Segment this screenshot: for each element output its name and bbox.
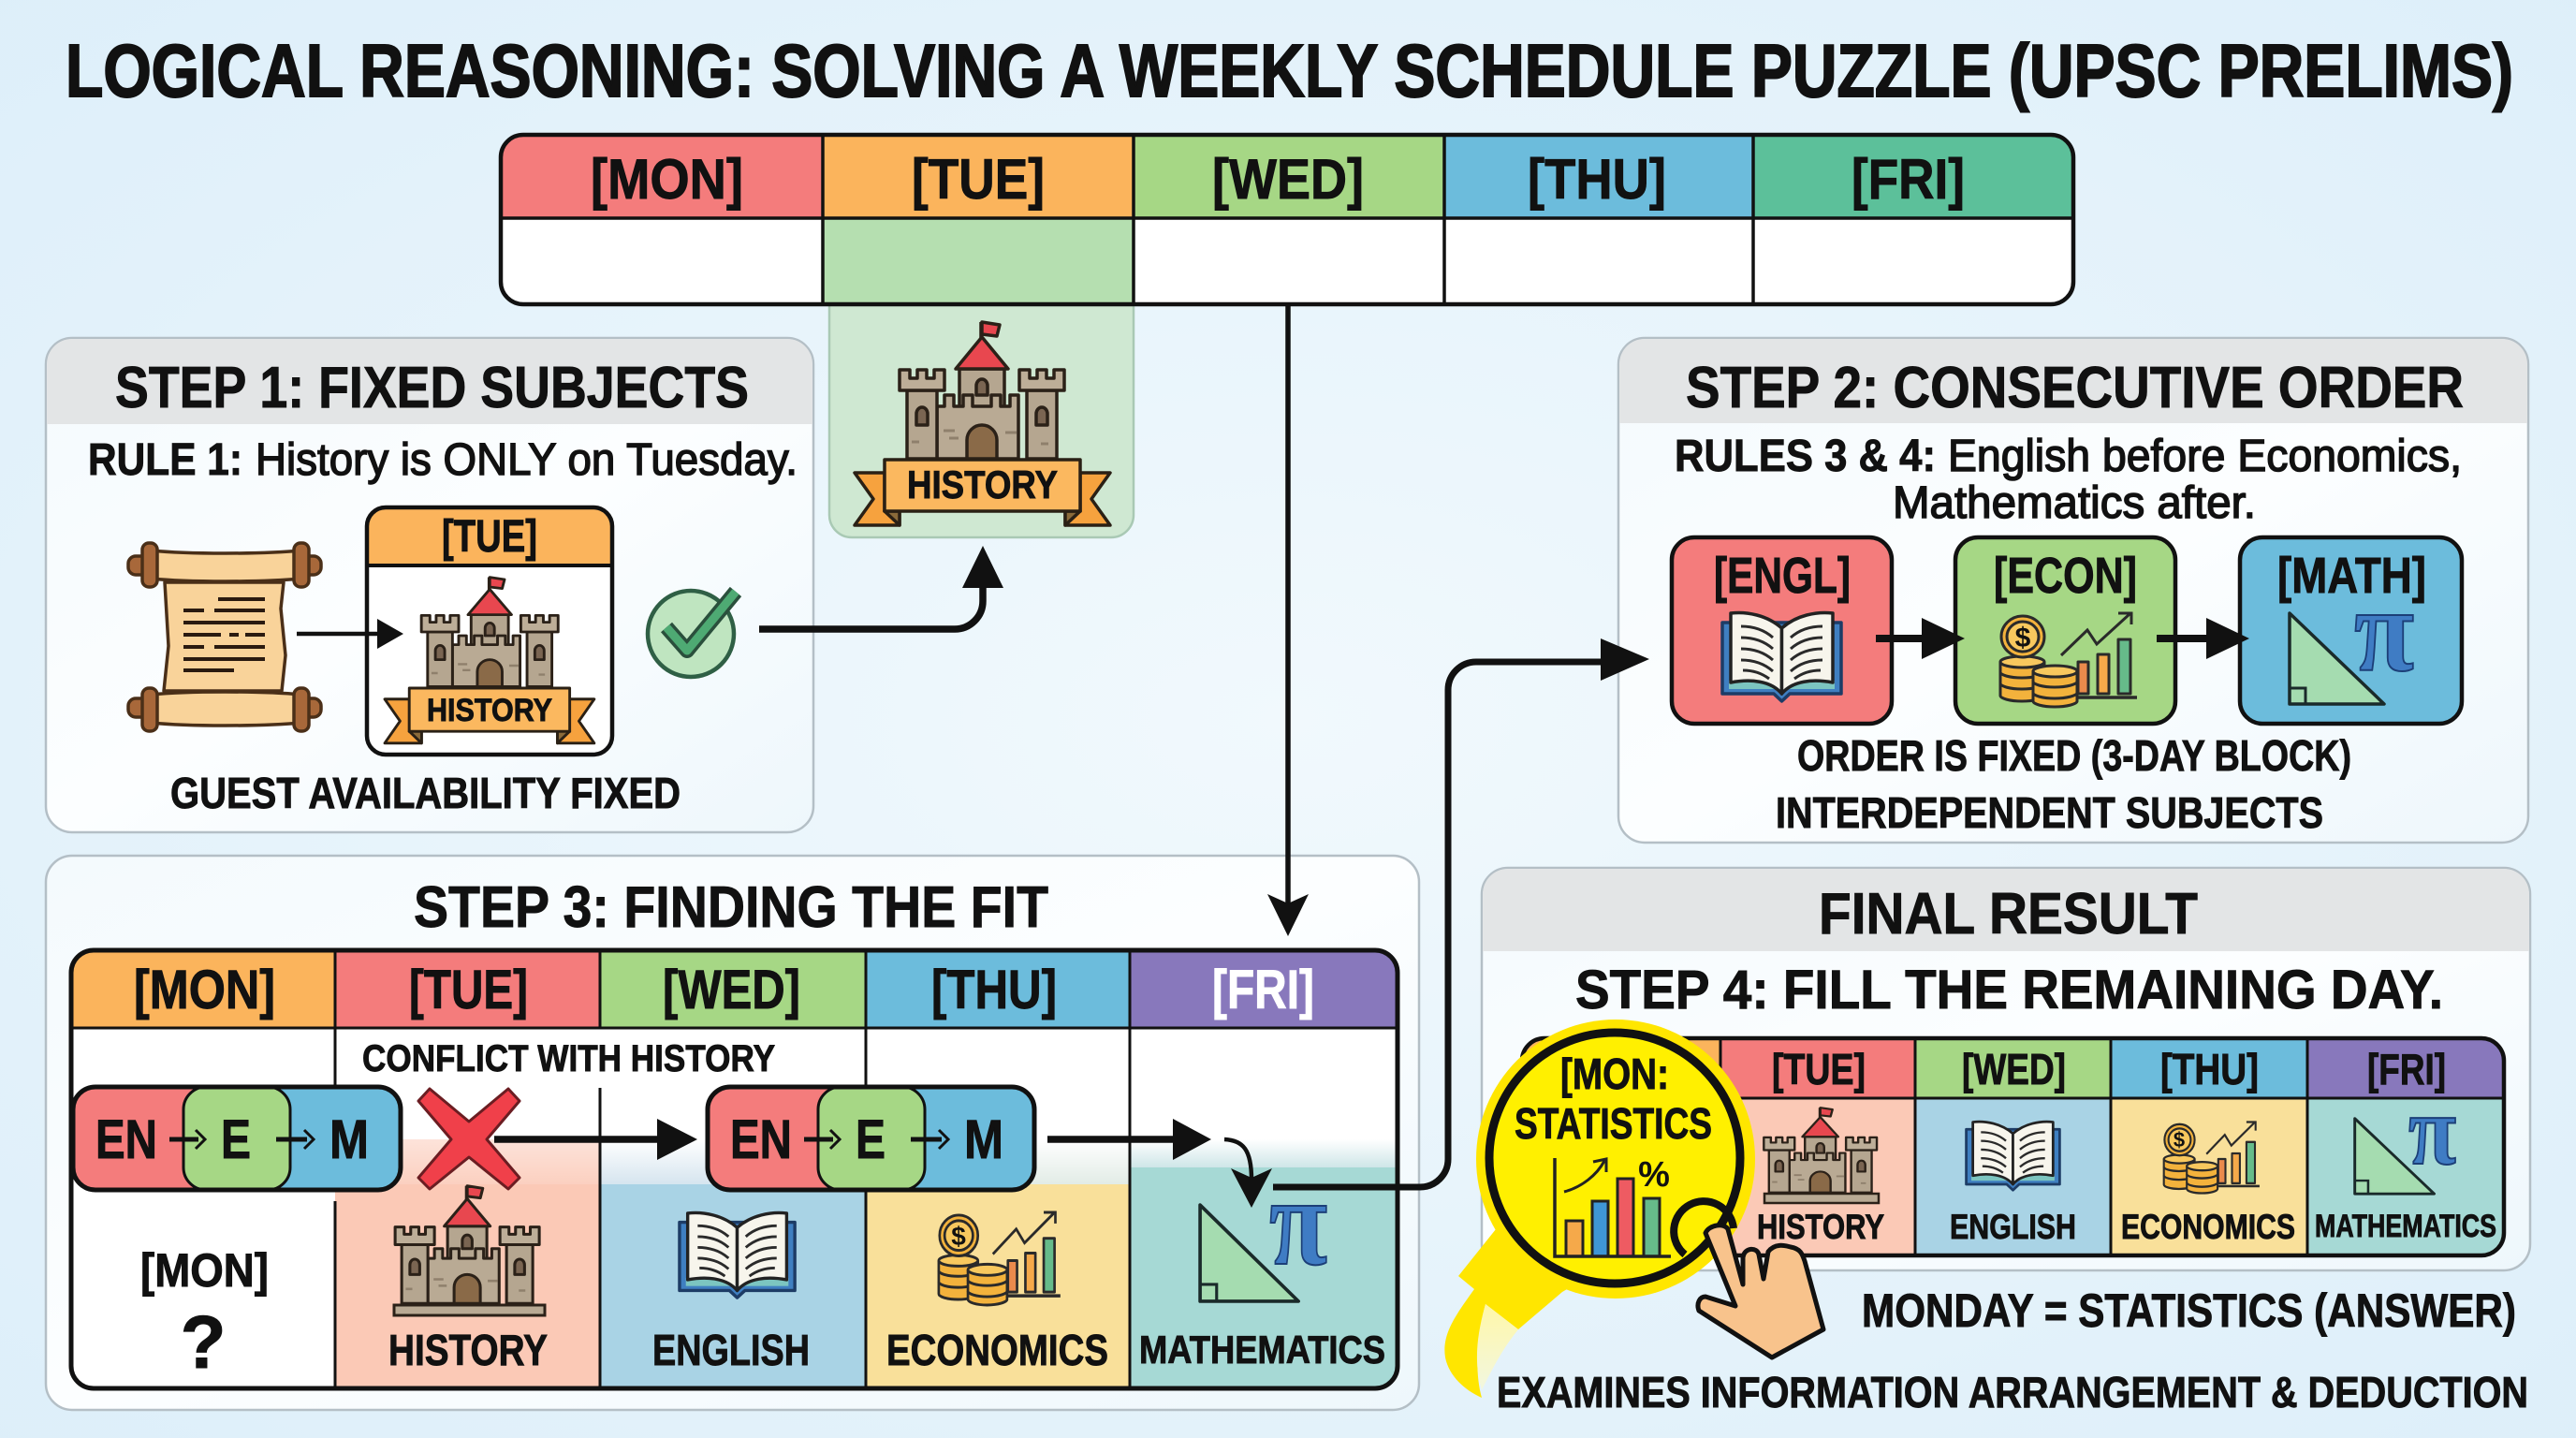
cell: History: HISTORY: [1757, 1208, 1884, 1246]
cell: Economics: [2121, 1123, 2295, 1246]
cell: Monday unknown: ?: [181, 1300, 226, 1384]
schedule table: step 3: [FRI]: [1212, 960, 1314, 1020]
arrow: English to Economics: [1876, 618, 1965, 659]
arrow: fit to step 2: [1273, 638, 1649, 1187]
box: Economics: $: [2015, 623, 2031, 653]
cell: English: ENGLISH: [1950, 1208, 2076, 1246]
icon: castle: [900, 322, 1064, 459]
schedule table: step 3: [THU]: [931, 960, 1057, 1020]
cell: Economics: ECONOMICS: [886, 1326, 1108, 1374]
weekly schedule table: [FRI]: [1852, 148, 1965, 211]
block: EN E M first attempt: [73, 1087, 401, 1190]
schedule table: step 3: [MON]: [134, 960, 275, 1020]
cell: History: HISTORY: [388, 1326, 548, 1374]
panel: step 1: [46, 338, 813, 832]
block: EN E M second attempt: EN: [730, 1109, 792, 1170]
heading: step 4: STEP 4: FILL THE REMAINING DAY.: [1575, 960, 2443, 1020]
cell: Economics: [886, 1212, 1108, 1374]
cell: History: [388, 1186, 548, 1374]
rules 3 and 4 text: RULES 3 & 4:: [1675, 432, 1936, 481]
box: Mathematics: [MATH]: [2277, 548, 2426, 604]
arrow: continue to Friday: [1047, 1119, 1211, 1160]
heading: step 3: STEP 3: FINDING THE FIT: [414, 875, 1048, 940]
icon: history banner: [385, 688, 594, 743]
weekly schedule table: [THU]: [1528, 148, 1666, 211]
icon: history banner: HISTORY: [907, 462, 1058, 506]
weekly schedule table: [TUE]: [912, 148, 1045, 211]
schedule table: step 3: [TUE]: [409, 960, 528, 1020]
chart: statistics bars: %: [1638, 1155, 1670, 1195]
box: Economics: [ECON]: [1994, 548, 2137, 604]
panel: Tuesday history extension: [829, 304, 1134, 537]
block: EN E M second attempt: M: [964, 1109, 1003, 1170]
cell: History: [1757, 1108, 1884, 1246]
heading: final result: FINAL RESULT: [1819, 882, 2198, 946]
rule 1 text: History is ONLY on Tuesday.: [256, 435, 798, 485]
block: EN E M first attempt: EN: [95, 1109, 157, 1170]
rules 3 and 4 text: [1675, 432, 2462, 528]
schedule table: final: [1522, 1038, 2504, 1255]
icon: scroll: [128, 543, 321, 731]
cell: English: [1950, 1122, 2076, 1246]
caption: interdependent subjects: INTERDEPENDENT SUBJECTS: [1776, 788, 2323, 837]
cell: Mathematics: [2315, 1076, 2496, 1244]
icon: history banner: HISTORY: [427, 693, 552, 728]
block: EN E M second attempt: [708, 1087, 1034, 1190]
cell: Economics: $: [951, 1222, 966, 1251]
rules 3 and 4 text: Mathematics after.: [1893, 478, 2256, 528]
heading: step 2: STEP 2: CONSECUTIVE ORDER: [1686, 356, 2464, 420]
text: Statistics: STATISTICS: [1515, 1099, 1712, 1148]
cell: Monday unknown: [140, 1244, 269, 1384]
text: Monday: [MON:: [1560, 1049, 1669, 1098]
arrow: scroll to card: [297, 619, 403, 649]
icon: red cross: [418, 1089, 520, 1189]
cell: Mathematics: [1139, 1152, 1385, 1372]
heading: step 1: STEP 1: FIXED SUBJECTS: [115, 356, 749, 420]
arrow: small curved down: [1224, 1139, 1272, 1208]
icon: pointing hand: [1698, 1225, 1823, 1357]
caption: order fixed: ORDER IS FIXED (3-DAY BLOCK): [1797, 731, 2351, 780]
arrow: Economics to Mathematics: [2157, 618, 2249, 659]
schedule table: final: [TUE]: [1772, 1045, 1866, 1093]
arrow: top table to Friday: [1267, 304, 1309, 936]
card: Tuesday: [367, 507, 612, 755]
schedule table: final: [FRI]: [2367, 1045, 2446, 1093]
cell: Economics: $: [2174, 1128, 2185, 1152]
panel: step 2: [1618, 338, 2528, 843]
cell: Monday unknown: [MON]: [140, 1244, 269, 1297]
icon: magnifier with Monday statistics: [1476, 1020, 1755, 1299]
panel: step 3: [46, 856, 1419, 1410]
weekly schedule table: [501, 135, 2073, 304]
cell: English: [652, 1212, 810, 1374]
icon: castle: [421, 578, 558, 686]
cell: English: ENGLISH: [652, 1326, 810, 1374]
chart: statistics bars: [1555, 1155, 1671, 1256]
box: Mathematics: π: [2354, 564, 2414, 697]
weekly schedule table: [MON]: [591, 148, 743, 211]
block: EN E M second attempt: E: [856, 1109, 886, 1170]
arrow: check to Tuesday panel: [759, 546, 1003, 629]
conflict label: CONFLICT WITH HISTORY: [362, 1038, 775, 1079]
card: Tuesday: [TUE]: [442, 512, 537, 562]
cell: Mathematics: π: [2408, 1076, 2456, 1185]
arrow: shift to Wednesday: [494, 1119, 697, 1160]
box: English: [ENGL]: [1714, 548, 1851, 604]
rules 3 and 4 text: English before Economics,: [1948, 432, 2462, 481]
schedule table: step 3: [71, 950, 1398, 1388]
box: Mathematics: [2240, 537, 2462, 724]
cell: Mathematics: π: [1269, 1152, 1327, 1292]
icon: history banner: [855, 460, 1110, 525]
rule 1 text: RULE 1:: [88, 435, 242, 485]
block: EN E M first attempt: E: [221, 1109, 251, 1170]
cell: Mathematics: MATHEMATICS: [2315, 1209, 2496, 1244]
schedule table: final: [THU]: [2160, 1045, 2259, 1093]
box: English: [1672, 537, 1892, 724]
panel: final result: [1482, 868, 2530, 1270]
cell: Economics: ECONOMICS: [2121, 1208, 2295, 1246]
cell: Mathematics: MATHEMATICS: [1139, 1328, 1385, 1372]
weekly schedule table: [WED]: [1212, 148, 1364, 211]
caption: guest availability: GUEST AVAILABILITY FIXED: [170, 769, 681, 817]
schedule table: final: [WED]: [1962, 1045, 2066, 1093]
icon: check mark: [648, 591, 736, 677]
icon: yellow highlight beam: [1444, 1229, 1610, 1398]
box: Economics: [1955, 537, 2175, 724]
schedule table: step 3: [WED]: [663, 960, 800, 1020]
block: EN E M first attempt: M: [329, 1109, 369, 1170]
